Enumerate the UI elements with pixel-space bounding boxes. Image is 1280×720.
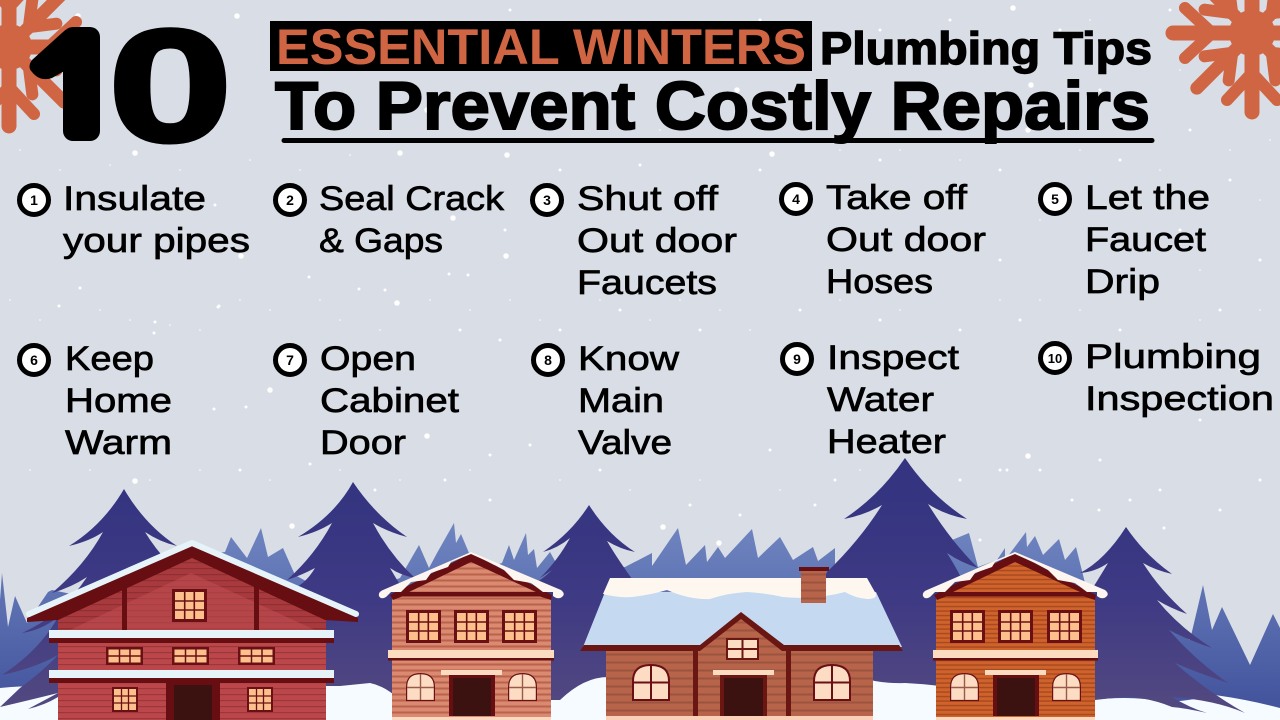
tip 3 <box>532 180 737 302</box>
roof snow <box>603 578 876 599</box>
arched windows <box>633 665 850 700</box>
front pine trees <box>0 489 1245 720</box>
wall <box>392 556 551 717</box>
background mountains <box>0 523 1280 720</box>
tip 8: Valve <box>578 424 672 462</box>
tip 6: Keep <box>65 340 154 378</box>
tip 7: 7 <box>286 352 294 368</box>
attic window <box>172 589 207 622</box>
heading underline <box>284 138 1152 143</box>
upper windows <box>406 610 537 643</box>
icon: left snowflake <box>0 0 88 126</box>
gable wall <box>58 556 326 720</box>
ledge <box>933 650 1098 660</box>
tip 5: Drip <box>1085 263 1160 301</box>
tip 7: Cabinet <box>320 382 460 420</box>
walls <box>606 650 873 716</box>
sill <box>606 716 873 720</box>
tip 5: 5 <box>1051 191 1059 207</box>
cross gable fill <box>699 616 784 650</box>
snow ground <box>0 677 1280 720</box>
upper windows <box>950 610 1082 643</box>
tip 4: Take off <box>826 179 968 217</box>
tip 6: Home <box>65 382 172 420</box>
tip 9: Inspect <box>827 339 960 377</box>
tip 1 <box>20 180 250 260</box>
tip 10: Plumbing <box>1085 338 1261 376</box>
house 1: red chalet <box>27 543 358 720</box>
roof snow <box>29 543 356 614</box>
tip 8 <box>534 340 680 462</box>
tip 7: Open <box>320 340 416 378</box>
lower balcony <box>49 678 334 683</box>
tip 6 <box>20 340 172 462</box>
tip 2: & Gaps <box>319 222 443 260</box>
wall <box>936 556 1095 717</box>
tip 4 <box>782 179 986 301</box>
tip 8: Know <box>578 340 680 378</box>
door <box>441 670 502 716</box>
snowy roof <box>923 552 1108 600</box>
tip 3: Out door <box>577 222 737 260</box>
tip 7 <box>276 340 460 462</box>
maroon roof <box>27 545 358 622</box>
tip 4: Out door <box>826 221 986 259</box>
tip 9: 9 <box>793 351 801 367</box>
sill <box>392 717 551 720</box>
heading: essential winters: ESSENTIAL WINTERS <box>276 19 806 75</box>
door <box>713 670 774 716</box>
tip 1: your pipes <box>63 222 250 260</box>
upper balcony snow <box>49 630 334 638</box>
middle windows <box>106 647 275 665</box>
gable window <box>726 638 759 660</box>
chimney <box>799 567 829 603</box>
tip 9: Water <box>827 381 934 419</box>
heading: plumbing tips: Plumbing Tips <box>820 23 1152 74</box>
house 2: salmon house <box>379 552 564 720</box>
digit one <box>30 27 100 141</box>
tip 4: Hoses <box>826 263 933 301</box>
tip 5: Faucet <box>1085 221 1207 259</box>
roof posts <box>122 586 259 630</box>
gable highlight <box>70 573 315 630</box>
arched windows <box>951 674 1080 700</box>
lower windows <box>112 687 273 712</box>
posts <box>693 651 791 716</box>
tip 9: Heater <box>827 423 946 461</box>
tip 2 <box>276 180 505 260</box>
snowy roof <box>379 552 564 600</box>
falling snow <box>10 8 1270 543</box>
blue roof <box>583 592 902 647</box>
door <box>985 670 1046 716</box>
tip 6: 6 <box>30 352 38 368</box>
heading: to prevent costly repairs: To Prevent Costly Repairs <box>275 68 1150 144</box>
pine trees behind snow <box>287 458 1000 720</box>
ledge <box>388 650 554 660</box>
tip 2: 2 <box>286 192 294 208</box>
tip 5 <box>1040 179 1210 301</box>
middle storey wall <box>58 640 326 720</box>
tip 1: 1 <box>30 192 38 208</box>
arched windows <box>407 674 536 700</box>
tip 10: Inspection <box>1085 380 1274 418</box>
icon: right snowflake <box>1173 0 1280 112</box>
tip 10: 10 <box>1048 351 1062 366</box>
tip 1: Insulate <box>63 180 206 218</box>
tip 8: 8 <box>544 352 552 368</box>
sill <box>936 717 1095 720</box>
upper balcony <box>49 638 334 643</box>
house 3: snow-roofed brown house <box>580 567 903 720</box>
house 4: orange house <box>923 552 1108 720</box>
tip 5: Let the <box>1085 179 1210 217</box>
door <box>166 683 220 720</box>
digit zero: 0 <box>108 0 233 176</box>
tip 7: Door <box>320 424 406 462</box>
eaves <box>580 612 903 651</box>
tip 3: 3 <box>543 192 551 208</box>
title number 10 <box>30 27 226 144</box>
tip 10 <box>1040 338 1274 418</box>
digit one: 1 <box>34 0 123 177</box>
tip 2: Seal Crack <box>319 180 505 218</box>
tip 8: Main <box>578 382 664 420</box>
tip 3: Faucets <box>577 264 717 302</box>
tip 4: 4 <box>792 191 800 207</box>
tip 9 <box>782 339 960 461</box>
lower balcony snow <box>49 670 334 678</box>
tip 6: Warm <box>65 424 172 462</box>
tip 3: Shut off <box>577 180 719 218</box>
